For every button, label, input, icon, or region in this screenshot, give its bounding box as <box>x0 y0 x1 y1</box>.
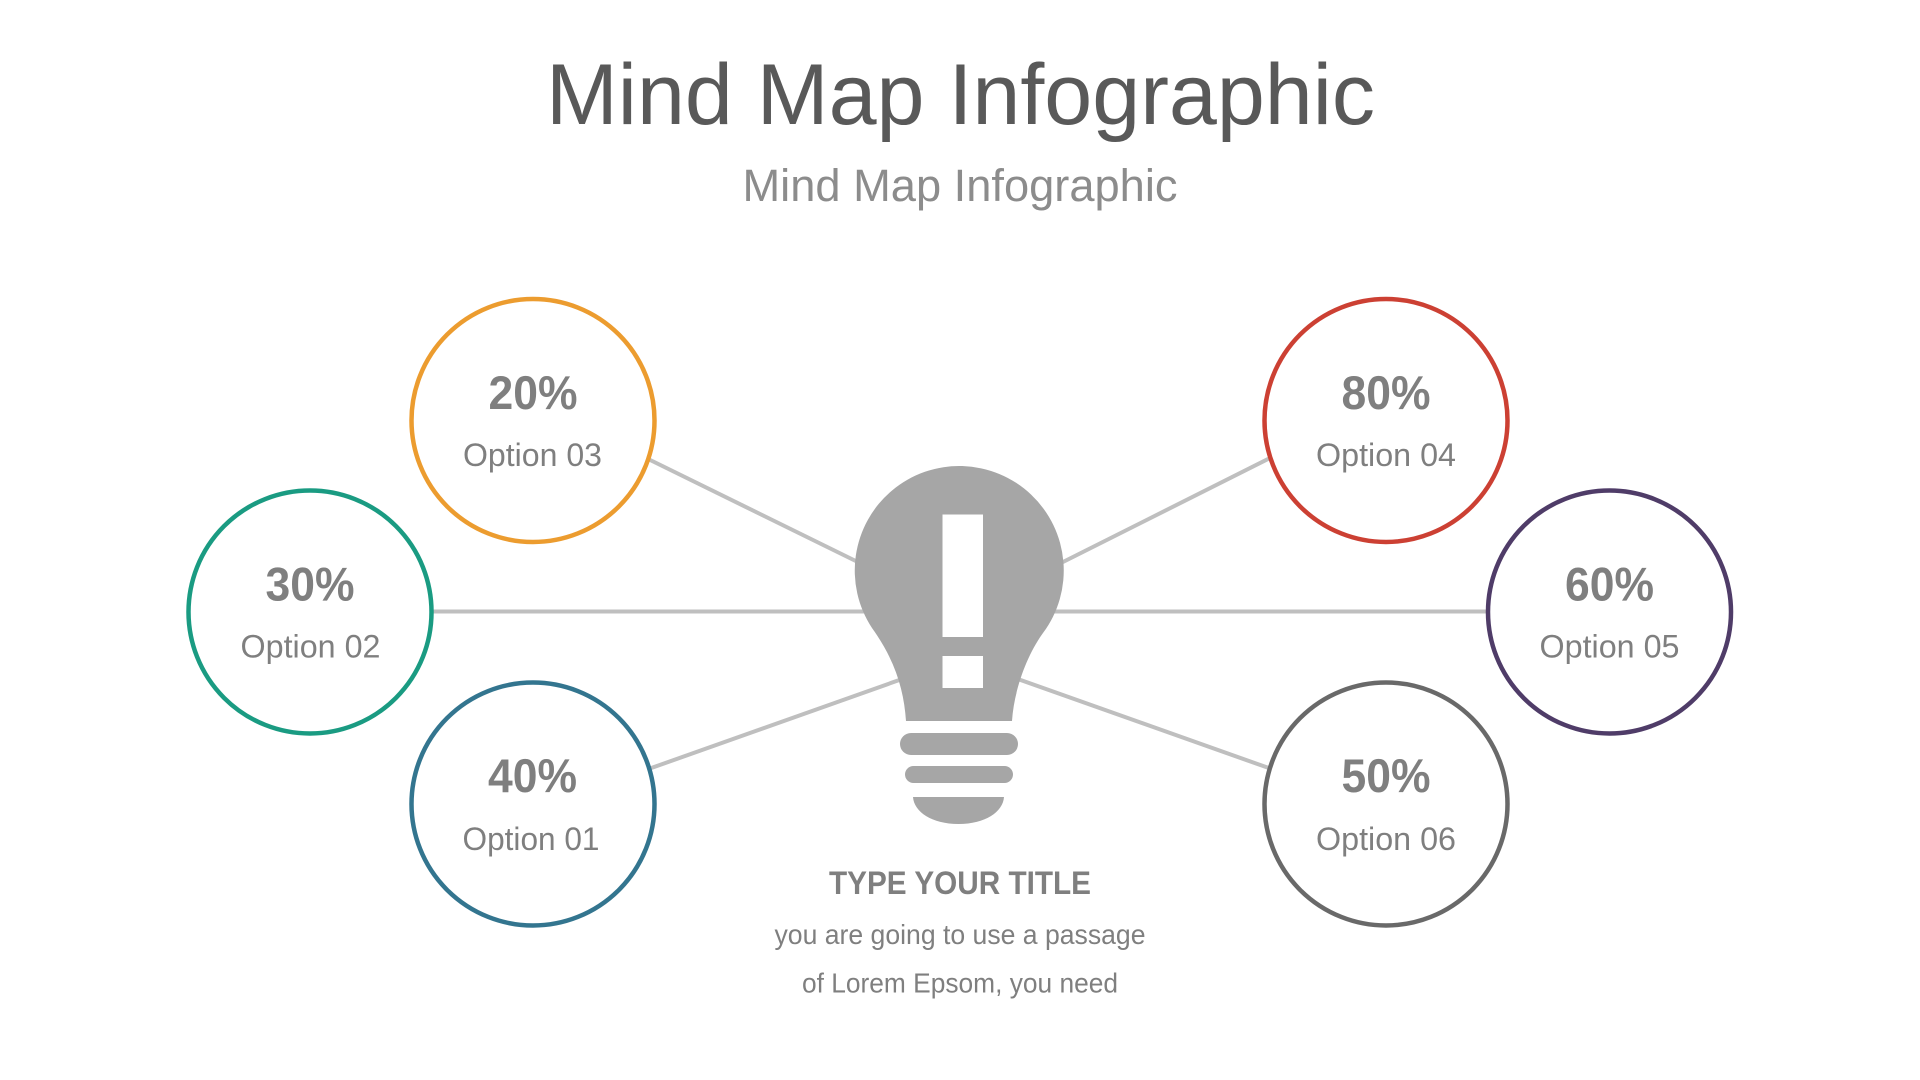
label: Option 01 <box>462 821 600 857</box>
subtitle: Mind Map Infographic <box>742 160 1178 211</box>
node: Option 02 <box>188 490 432 734</box>
bulb base bottom cap <box>913 797 1004 824</box>
label: Option 05 <box>1540 628 1680 664</box>
bulb base top ring <box>900 733 1018 755</box>
title: Mind Map Infographic <box>546 47 1375 143</box>
value: 20% <box>488 366 578 419</box>
value: 40% <box>488 749 577 802</box>
ring <box>1264 299 1508 542</box>
icon: light bulb with exclamation mark <box>855 466 1064 824</box>
value: 30% <box>266 558 354 610</box>
node: Option 05 <box>1488 490 1731 734</box>
caption line 1: you are going to use a passage <box>774 919 1146 950</box>
exclamation mark <box>942 514 983 688</box>
caption line 2: of Lorem Epsom, you need <box>802 968 1118 998</box>
value: 80% <box>1342 366 1430 419</box>
bulb glass <box>855 466 1064 721</box>
node: Option 06 <box>1264 682 1508 926</box>
ring <box>412 299 654 542</box>
value: 60% <box>1565 558 1654 610</box>
ring <box>1264 682 1508 926</box>
label: Option 02 <box>240 628 380 664</box>
label: Option 04 <box>1316 437 1456 473</box>
node: Option 04 <box>1264 299 1508 542</box>
node: Option 01 <box>412 682 654 926</box>
bulb base middle ring <box>905 766 1013 783</box>
caption text <box>774 919 1146 998</box>
label: Option 03 <box>463 437 602 473</box>
node: Option 03 <box>412 299 654 542</box>
label: Option 06 <box>1316 821 1456 857</box>
value: 50% <box>1342 749 1430 802</box>
connector lines <box>420 453 1500 772</box>
caption heading: TYPE YOUR TITLE <box>829 865 1091 901</box>
ring <box>412 682 654 926</box>
ring <box>188 490 432 734</box>
ring <box>1488 490 1731 734</box>
